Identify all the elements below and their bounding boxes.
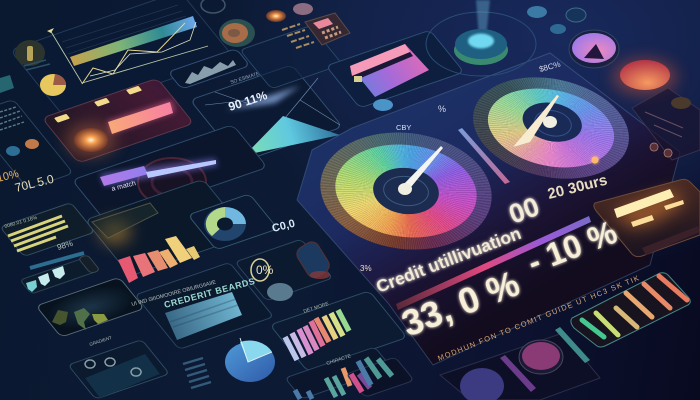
pie chart [40,74,66,96]
credit heading panel [131,262,274,349]
orange coin [266,10,286,22]
panel: bottom centre bars [285,347,392,399]
percent text: 0% [256,263,274,277]
heading: CREDERIT BEARDS [163,276,256,310]
dome label lines [24,60,50,70]
orb center [468,34,494,48]
toggle [78,255,100,274]
bar 3 [147,250,168,271]
rainbow band [70,16,197,66]
panel: top widgets [201,0,350,89]
list rows [282,24,314,48]
panel heading: SO ESIMATE [230,71,261,86]
blue dot [6,146,20,156]
round badges [650,143,672,157]
bars glow [612,190,686,228]
chart axes [50,30,208,83]
bar lime [331,313,343,336]
bar green [338,310,349,331]
panel: left stats [0,75,73,195]
glow frame [92,203,158,238]
hub ball two [543,116,557,128]
label: credit utilization: Credit utillivuation [373,223,524,297]
gauge two hub [519,97,586,147]
dome highlight [27,46,33,61]
bar orange [343,368,350,386]
bars blue [358,361,371,385]
panel: bottom mini dashboard [68,335,169,399]
pink circle [519,340,563,374]
big value 10%: - 10 % [523,214,622,281]
tag label: a match [111,180,137,193]
icon three [52,266,65,279]
teal bar [555,327,590,363]
bar 5 [165,236,192,263]
panel: glowing orange bars [594,179,700,257]
pie lines [240,338,272,362]
teal triangle [245,116,340,155]
bar 6 [186,246,200,260]
orb lower ring [454,35,508,65]
orange orb [74,128,108,152]
gauge two face [480,78,622,178]
pink bar glow [107,100,175,134]
wave bars [185,60,236,84]
label percent top: $8C% [538,60,562,74]
heading: CHIRACTE [326,353,353,367]
small teal icon [0,75,14,93]
glowing value: 90 11% [227,88,269,114]
panel heading: 0080.01 0.16% [4,215,38,230]
panel: triangle chart [190,65,342,162]
orb beam [476,0,490,38]
panel: world map [36,277,144,337]
panel: glowing meter [42,78,194,163]
circles [85,358,141,376]
third bar [664,200,684,210]
panel: wave chart [168,49,250,89]
big value 33,0%: 33, 0 % [396,262,525,344]
bar pink [305,326,317,350]
panel: rainbow glowing bars [571,273,690,347]
gauge one rim texture [314,123,498,259]
icon two [38,273,50,286]
yellow pill 2 [94,98,110,107]
inner screen [85,354,160,398]
gauge one hub [370,164,442,218]
small label rows [645,112,683,137]
bar orange [626,293,652,317]
bar 2 [133,253,155,277]
stripes [183,358,211,388]
chart arrowhead [47,28,54,33]
purple circle [460,368,504,400]
panel: donut [188,194,278,250]
stat pair: 70L 5.0 [13,172,55,195]
bars teal [326,376,344,397]
radial light lines [205,78,340,125]
pie slice [53,74,66,85]
grey orb [267,283,293,301]
gold icon [671,97,691,109]
bar green [582,320,604,337]
card chip [354,76,362,82]
icon one [26,280,37,292]
divider slash [458,128,510,184]
bar tan [616,308,637,327]
hatch overlay [170,299,238,327]
disc inner [222,23,248,43]
calculator keys [322,27,341,38]
bar red [644,284,670,308]
bar coral [659,276,687,300]
panel: left chart [0,203,95,268]
bars blue [295,390,312,399]
chart hatch lines [62,5,186,54]
short bar [631,215,654,227]
main gauge panel background [297,53,680,365]
gauge one: large rainbow dial [314,123,498,259]
dial rings [138,158,206,206]
bar rose [311,321,323,346]
card body [350,44,429,97]
blue hatched block [165,292,242,340]
pie fill [572,33,616,63]
orange dot [25,139,39,149]
value hours: 20 30urs [546,172,609,203]
orange glow [99,220,131,244]
light streak [225,86,300,110]
caption: UI IND 0IIIOMOOIRE OBIURGIIAIIE [131,279,217,308]
bars teal [366,358,392,378]
card stripe [350,44,410,76]
calculator [305,13,350,45]
continent centre [74,308,90,330]
round blue button [373,99,393,111]
caption: MODHUN FON TO COMIT GUIDE UT HC3 SK TIK [436,273,641,363]
chart line yellow [82,23,185,84]
red orange disc [613,59,677,95]
bar coral [316,318,329,342]
yellow lines [8,216,68,251]
panel: purple streak dial [72,125,267,223]
violet bar [500,355,536,392]
yellow pill 3 [126,86,142,95]
orb upper ring [455,29,507,59]
blue slider [30,253,84,268]
disc face [620,60,670,90]
pink pie [293,3,313,15]
hub ball [398,183,412,195]
small circles top right [527,6,586,34]
bar lilac two [292,333,304,357]
label percent left: % [438,104,446,114]
gradient meter bar [396,216,591,310]
pink bar [108,102,173,134]
card magnetic strip [352,52,413,80]
heading: GRADIENT [89,335,113,347]
needle gauge one [398,146,443,195]
label CBY: CBY [396,123,411,132]
dark triangle [584,44,604,59]
panel: icon row [20,255,100,294]
value 00: 00 [505,191,543,230]
disc center [228,29,240,37]
chart line white [90,22,196,76]
calculator screen [313,18,333,29]
panel: percent and pill [235,239,333,301]
dark strip [642,226,700,255]
donut hole [217,218,233,230]
percent value: 98% [56,239,74,252]
stat text rows [0,107,24,130]
bar 4 [159,249,178,268]
yellow pill 1 [54,114,70,123]
donut blue arc [225,207,246,224]
rings icon [201,0,225,13]
panel: rainbow bars [270,291,407,372]
blue pill [294,239,332,280]
gauge one face [330,137,482,245]
disc widget [219,19,255,47]
needle gauge two [513,95,559,147]
donut ring [204,207,246,241]
orange spark [592,156,598,164]
panel: line chart [10,0,234,116]
circle two [566,8,586,22]
continent left [52,310,68,325]
bar orchid [299,329,311,354]
bars purple [359,374,370,388]
streak glow [100,158,218,186]
bars pink [351,374,362,392]
donut green arc [206,207,225,236]
continent right [92,314,108,324]
bar 1 [118,256,138,283]
pie chart blue [183,338,275,388]
long bar [614,189,674,218]
bar yellow [596,313,618,335]
dome icon [15,40,45,66]
label 3%: 3% [360,264,372,273]
gauge two hub ring [532,107,574,140]
panel: bar chart warm [85,179,248,283]
pill lower glow [310,271,330,279]
gauge two: rainbow dial [464,64,638,192]
circle three [550,24,566,34]
glow behind orb [67,124,115,156]
bottom circles panel [440,327,600,400]
pale streak [146,160,216,178]
pie cyan slice [240,341,272,362]
small gauge value: C0,0 [271,218,296,235]
panel: orb [426,0,536,76]
dial inner ring [152,168,192,196]
bar yellow [324,316,336,339]
pink circle fill [522,342,560,370]
heading: DET MORE [303,301,330,315]
purple tag [100,166,148,186]
panel: credit card [326,30,464,111]
bar lilac [285,337,297,360]
gauge two rim texture [464,64,638,192]
panel: right of centre bars [346,357,414,397]
ring percent [251,259,269,281]
purple pie [569,30,619,68]
panel: right column [632,88,700,160]
gauge one hub ring [381,173,431,209]
